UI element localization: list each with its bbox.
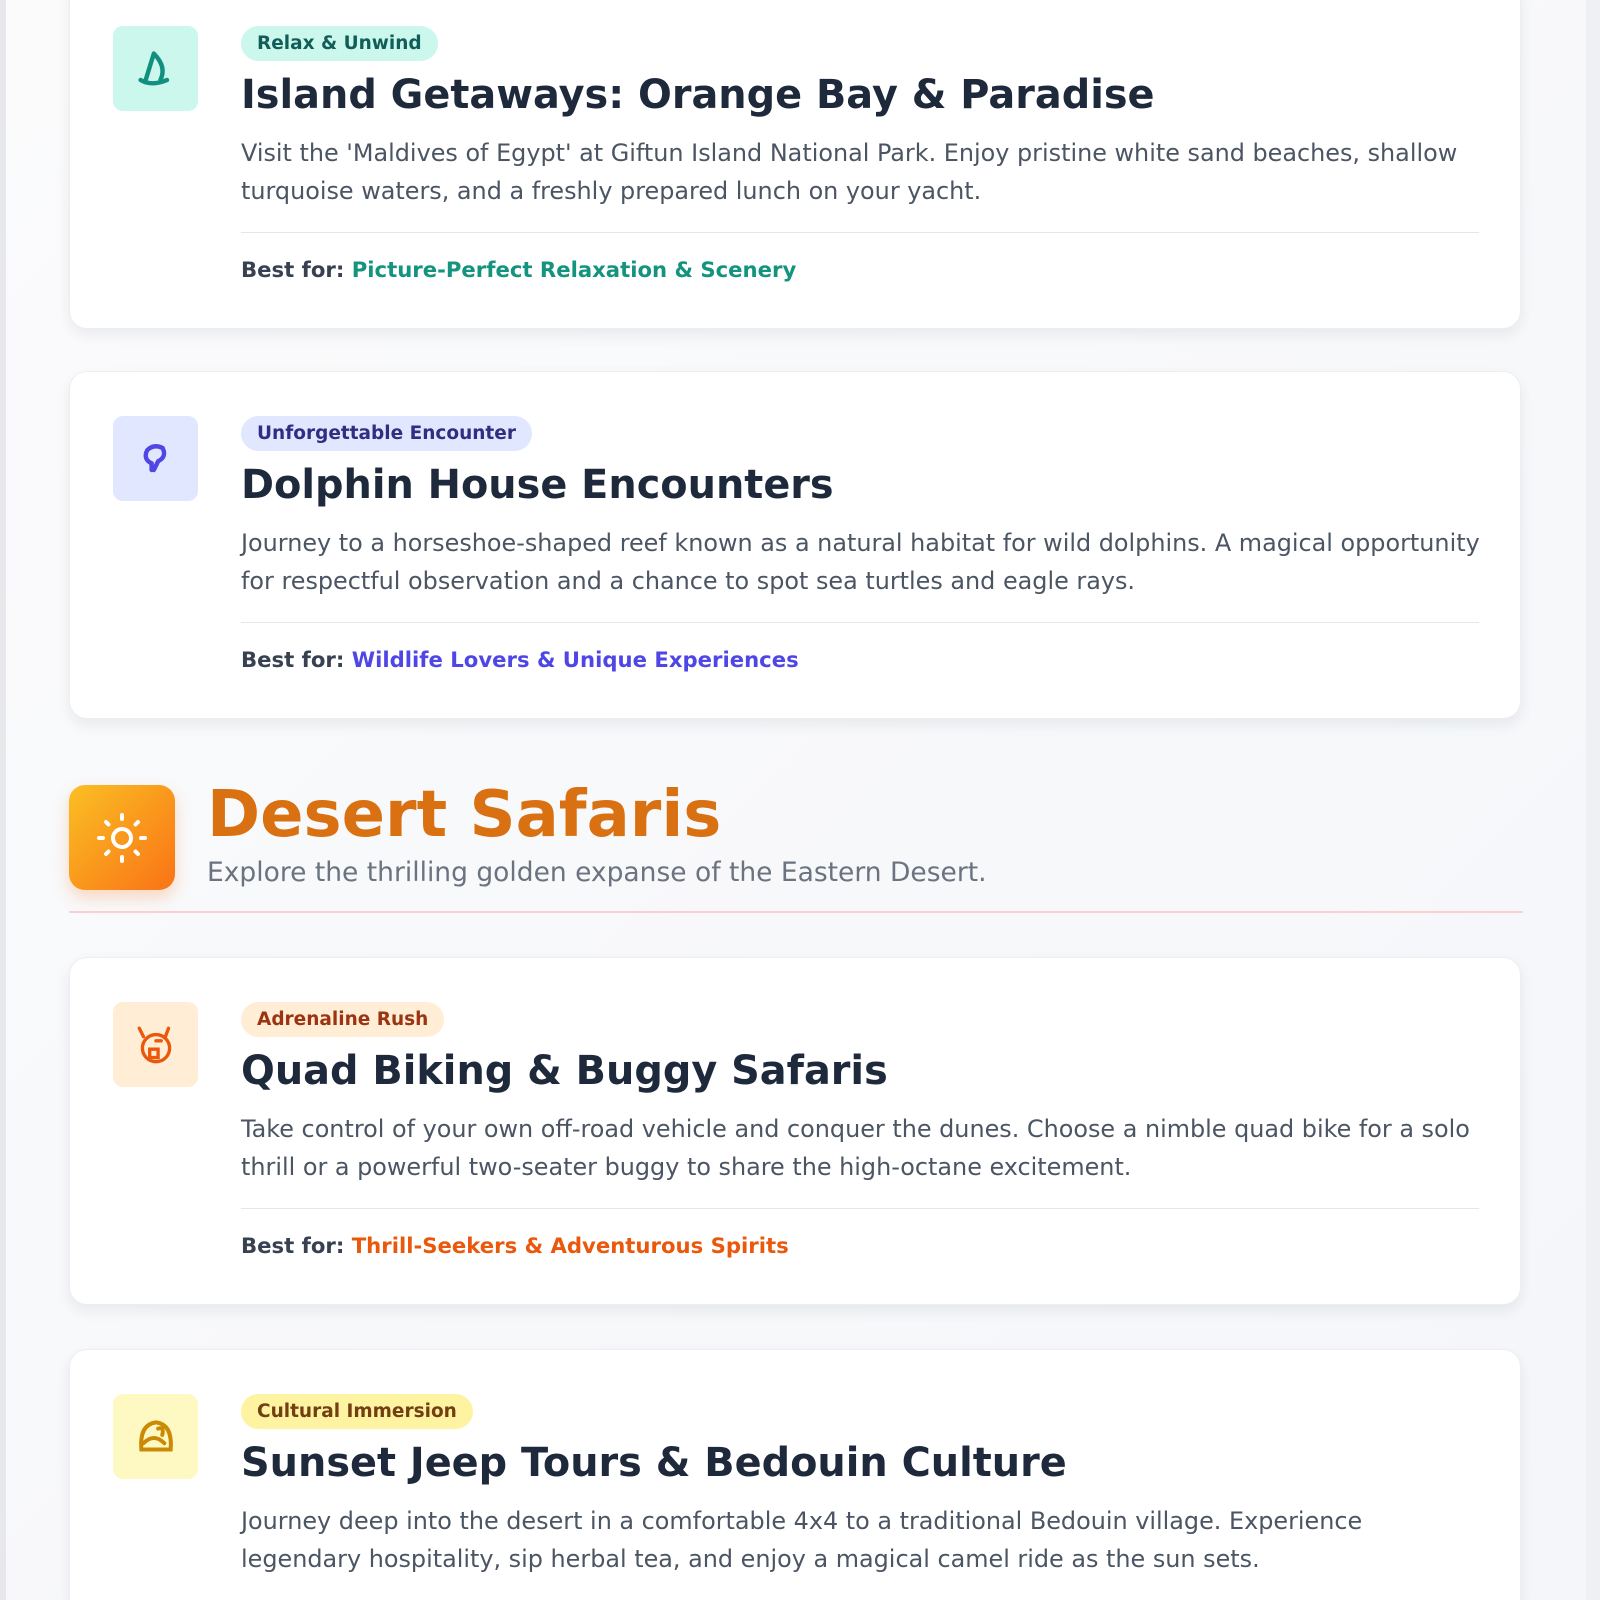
heading: Island Getaways: Orange Bay & Paradise: [241, 72, 1155, 118]
best for: Best for: Wildlife Lovers & Unique Experiences: [241, 647, 799, 672]
heading: Quad Biking & Buggy Safaris: [241, 1048, 888, 1094]
section subtitle: Explore the thrilling golden expanse of the Eastern Desert.: [207, 857, 987, 888]
card: island getaways: [69, 0, 1521, 329]
icon: sun: [69, 785, 175, 890]
section header: desert safaris: [60, 778, 1523, 913]
section title: Desert Safaris: [207, 778, 721, 852]
description: Journey to a horseshoe-shaped reef known as a natural habitat for wild dolphins. A magical opportunity for respectful observation and a chance to spot sea turtles and eagle rays.: [241, 529, 1480, 594]
icon: sailboat: [113, 26, 198, 111]
icon: bike: [113, 1002, 198, 1087]
description: Visit the 'Maldives of Egypt' at Giftun Island National Park. Enjoy pristine white sand beaches, shallow turquoise waters, and a freshly prepared lunch on your yacht.: [241, 139, 1457, 204]
badge: [241, 416, 532, 451]
description: Journey deep into the desert in a comfortable 4x4 to a traditional Bedouin village. Experience legendary hospitality, sip herbal tea, and enjoy a magical camel ride as the sun sets.: [241, 1507, 1362, 1572]
badge: [241, 1002, 444, 1037]
icon: dolphin: [113, 416, 198, 501]
badge: Adrenaline Rush: [257, 1009, 428, 1030]
icon: camel: [113, 1394, 198, 1479]
heading: Sunset Jeep Tours & Bedouin Culture: [241, 1440, 1067, 1486]
badge: Relax & Unwind: [257, 33, 422, 54]
badge: [241, 1394, 473, 1429]
badge: Unforgettable Encounter: [257, 423, 516, 444]
badge: Cultural Immersion: [257, 1401, 457, 1422]
card: jeep tours: [69, 1349, 1521, 1600]
heading: Dolphin House Encounters: [241, 462, 834, 508]
best for: Best for: Picture-Perfect Relaxation & Scenery: [241, 257, 796, 282]
description: Take control of your own off-road vehicle and conquer the dunes. Choose a nimble quad bike for a solo thrill or a powerful two-seater buggy to share the high-octane excitement.: [241, 1115, 1470, 1180]
badge: [241, 26, 438, 61]
best for: Best for: Thrill-Seekers & Adventurous Spirits: [241, 1233, 789, 1258]
card: quad biking: [69, 957, 1521, 1305]
card: dolphin house: [69, 371, 1521, 719]
